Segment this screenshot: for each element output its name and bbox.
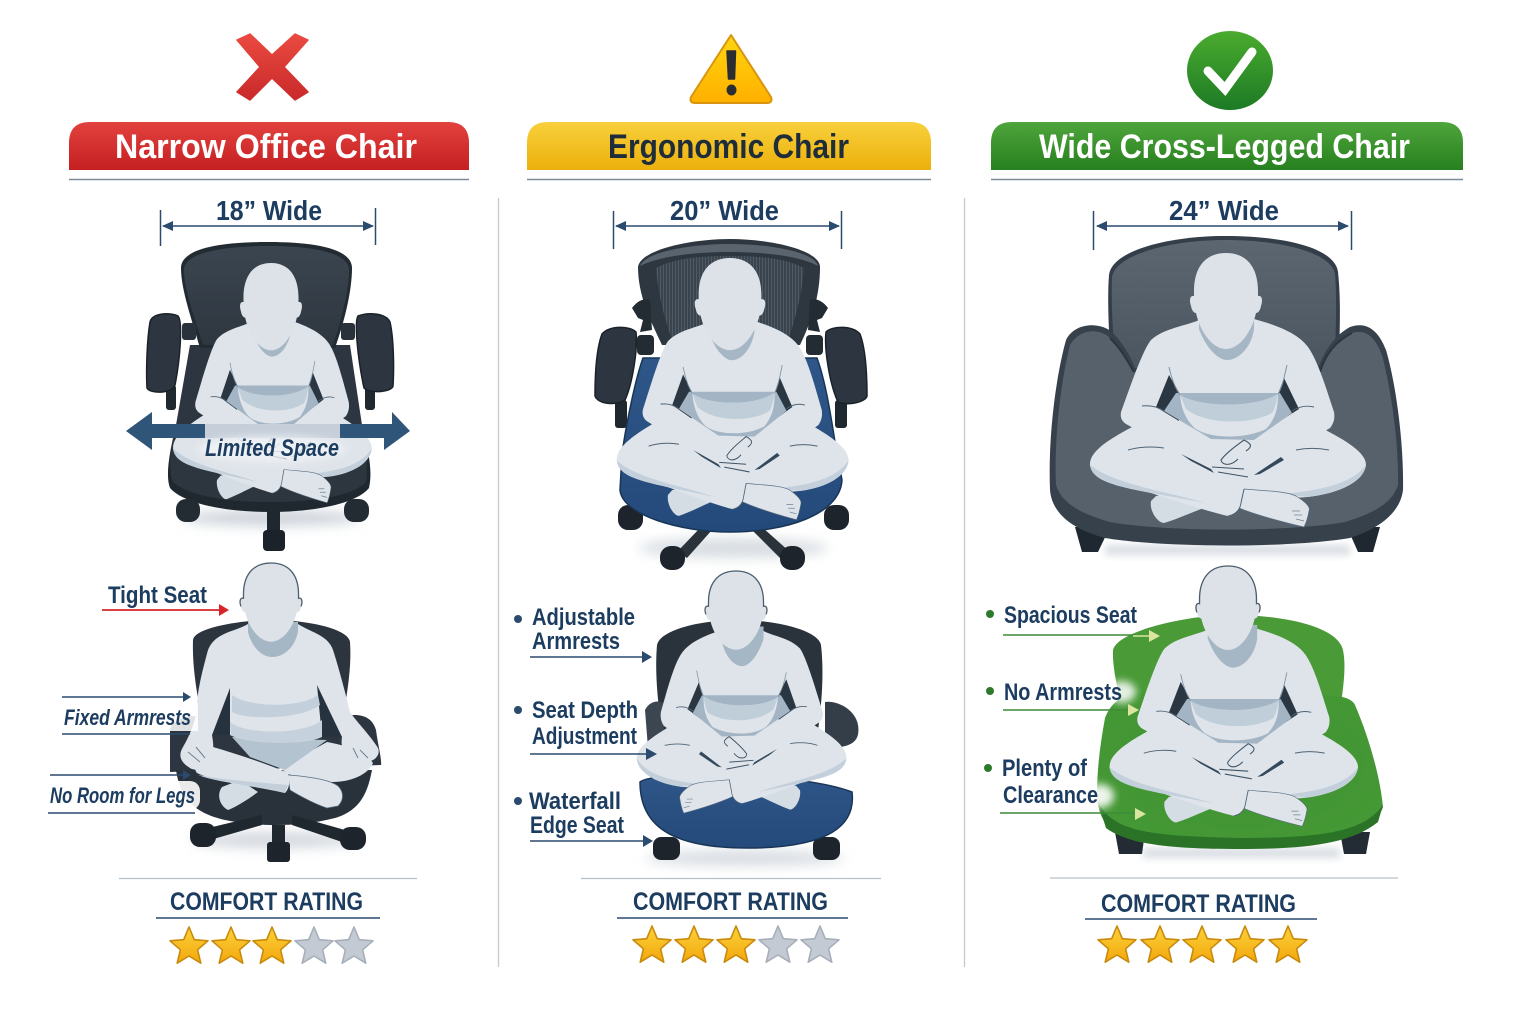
- callout: spacious seat: Spacious Seat: [1004, 602, 1137, 629]
- label: limited space: Limited Space: [205, 435, 339, 462]
- seated figure: narrow top: [173, 263, 372, 503]
- chair: wide top view: [1050, 236, 1403, 555]
- comfort rating: 3 of 5: COMFORT RATING: [633, 888, 828, 916]
- comfort rating: 3 of 5: COMFORT RATING: [170, 888, 363, 916]
- comfort rating: 5 of 5: COMFORT RATING: [1101, 890, 1296, 918]
- width dimension: 24 inch: [1094, 195, 1352, 250]
- callout: spacious seat: [986, 602, 1160, 642]
- column divider left: [498, 198, 500, 967]
- chair: ergonomic front view: [640, 620, 858, 866]
- panel: ergonomic chair: [514, 35, 931, 962]
- seated figure: ergonomic top: [617, 258, 849, 520]
- callout: no armrests: No Armrests: [1004, 679, 1122, 706]
- heading: ergonomic chair: [527, 122, 931, 180]
- callout: seat depth adjustment: Seat Depth: [532, 697, 638, 724]
- column divider right: [964, 198, 966, 967]
- chair: narrow office top view: [147, 242, 394, 551]
- icon: warning triangle: [690, 35, 772, 103]
- seated figure: wide front: [1110, 566, 1358, 826]
- width dimension: 18 inch: 18” Wide: [216, 195, 322, 226]
- comfort rating: 5 of 5: [1050, 878, 1398, 962]
- callout: waterfall edge seat: Waterfall: [529, 788, 621, 815]
- callout: no armrests: [986, 679, 1139, 716]
- seated figure: ergonomic front: [637, 571, 846, 813]
- callout: seat depth adjustment: Adjustment: [532, 723, 637, 750]
- heading: wide cross-legged chair: [991, 122, 1463, 180]
- limited space arrows: [126, 412, 410, 462]
- callout: waterfall edge seat: [514, 788, 653, 847]
- callout: fixed armrests: [62, 692, 198, 734]
- width dimension: 20 inch: 20” Wide: [670, 195, 779, 226]
- chair: wide green front view: [1097, 615, 1383, 858]
- callout: tight seat: Tight Seat: [108, 582, 207, 609]
- callout: plenty of clearance: [984, 755, 1146, 820]
- seated figure: wide top: [1090, 253, 1366, 527]
- chair: narrow front view: [170, 620, 381, 862]
- callout: no room for legs: [48, 770, 200, 813]
- callout: adjustable armrests: Armrests: [532, 628, 620, 655]
- callout: seat depth adjustment: [514, 697, 657, 760]
- seated figure: narrow front, hands on knees: [180, 563, 379, 810]
- width dimension: 20 inch: [614, 195, 842, 249]
- icon: red X: [237, 34, 308, 100]
- width dimension: 24 inch: 24” Wide: [1169, 195, 1279, 226]
- comfort rating: 3 of 5: [581, 878, 881, 962]
- callout: adjustable armrests: Adjustable: [532, 604, 635, 631]
- panel: narrow office chair: [48, 34, 469, 963]
- width dimension: 18 inch: [160, 195, 376, 246]
- callout: adjustable armrests: [514, 604, 652, 663]
- callout: no room for legs: No Room for Legs: [50, 783, 195, 808]
- panel: wide cross-legged chair: [984, 31, 1463, 962]
- callout: fixed armrests: Fixed Armrests: [64, 705, 191, 730]
- heading: narrow office chair: Narrow Office Chair: [115, 128, 417, 166]
- heading: narrow office chair: [69, 122, 469, 180]
- chair: ergonomic top view: [595, 239, 867, 570]
- heading: ergonomic chair: Ergonomic Chair: [608, 128, 849, 166]
- heading: wide cross-legged chair: Wide Cross-Legged Chair: [1039, 128, 1410, 166]
- callout: plenty of clearance: Clearance: [1003, 782, 1098, 809]
- callout: plenty of clearance: Plenty of: [1002, 755, 1088, 782]
- callout: waterfall edge seat: Edge Seat: [530, 812, 624, 839]
- icon: green check: [1187, 31, 1273, 110]
- comfort rating: 3 of 5: [119, 878, 417, 963]
